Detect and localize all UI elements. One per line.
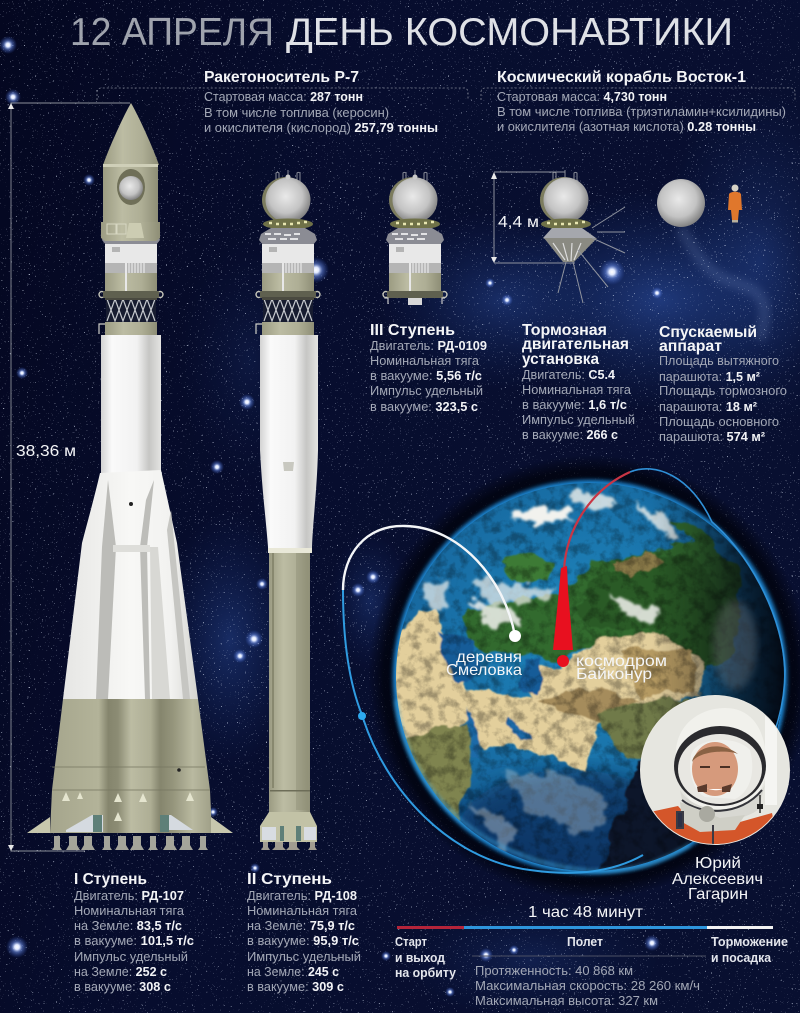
flight duration timeline: Максимальная высота: 327 км [475,993,658,1008]
launch marker and label [557,653,667,683]
text: stage II: Двигатель: РД-108 [247,888,357,903]
rocket: full R-7 with fairing [27,103,233,850]
orbit: white descent arc [343,526,515,636]
orbit: blue flight path upper right [630,469,785,730]
orbit: blue flight path left and bottom [343,590,643,873]
text: stage I: Двигатель: РД-107 [74,888,184,903]
name caption: Гагарин [688,886,748,903]
text: retro engine: в вакууме: 266 с [522,427,618,442]
landing marker and label: деревня [456,649,522,666]
text: stage III: в вакууме: 5,56 т/с [370,368,482,383]
text: stage I: в вакууме: 308 с [74,979,171,994]
text: retro engine: установка [522,351,599,368]
spacecraft Vostok with retro rocket [491,170,625,303]
text: descent module [659,324,787,444]
icon: red rocket silhouette [553,566,573,650]
text: stage I: в вакууме: 101,5 т/с [74,933,194,948]
text: stage I: I Ступень [74,871,147,888]
flight duration timeline: 1 час 48 минут [528,904,644,921]
rocket: second stage with spacecraft [256,170,320,850]
panel: R-7 launch vehicle stats: В том числе топлива (керосин) [204,105,389,120]
text: stage I: Импульс удельный [74,949,188,964]
spacecraft Vostok with retro rocket: 4,4 м [498,214,539,231]
boosters and core [27,335,233,850]
text: stage I: на Земле: 252 с [74,964,167,979]
panel: Vostok-1 spacecraft stats: и окислителя (азотная кислота) 0.28 тонны [497,119,756,134]
text: stage II: на Земле: 75,9 т/с [247,918,355,933]
flight duration timeline: Максимальная скорость: 28 260 км/ч [475,978,700,993]
text: stage III: в вакууме: 323,5 с [370,399,478,414]
flight duration timeline: Старт [395,934,427,949]
text: descent module: парашюта: 18 м² [659,399,758,414]
flight duration timeline: Полет [567,934,603,949]
rocket: third stage with spacecraft [383,170,447,305]
text: stage II: на Земле: 245 с [247,964,339,979]
descent capsule sphere [657,179,705,227]
panel: Vostok-1 spacecraft stats [481,69,795,134]
text: retro engine: Двигатель: С5.4 [522,367,616,382]
flight duration timeline: на орбиту [395,965,457,980]
panel: Vostok-1 spacecraft stats: В том числе топлива (триэтиламин+ксилидины) [497,104,786,119]
panel: Vostok-1 spacecraft stats: Космический корабль Восток-1 [497,69,746,86]
icon: cosmonaut figure [728,184,742,222]
text: retro engine: в вакууме: 1,6 т/с [522,397,627,412]
text: retro engine: Тормозная [522,322,607,339]
text: stage II: Номинальная тяга [247,903,358,918]
text: stage II [247,871,361,994]
panel: R-7 launch vehicle stats [97,69,468,135]
title [70,11,733,54]
title: ДЕНЬ КОСМОНАВТИКИ [286,11,733,54]
flight duration timeline: и посадка [711,950,772,965]
text: stage III: Импульс удельный [370,383,483,398]
text: stage I [74,871,194,994]
launch marker and label: космодром [576,653,667,670]
panel: R-7 launch vehicle stats: и окислителя (кислород) 257,79 тонны [204,120,438,135]
flight duration timeline: Протяженность: 40 868 км [475,963,633,978]
earth globe [368,455,800,899]
text: stage III: Номинальная тяга [370,353,480,368]
text: stage II: в вакууме: 309 с [247,979,344,994]
text: retro engine [522,322,635,442]
text: stage I: Номинальная тяга [74,903,185,918]
launch marker and label: Байконур [576,666,652,683]
panel: Vostok-1 spacecraft stats: Стартовая масса: 4,730 тонн [497,89,667,104]
text: descent module: парашюта: 1,5 м² [659,369,761,384]
text: retro engine: двигательная [522,336,629,353]
text: stage III [370,322,487,414]
text: stage II: в вакууме: 95,9 т/с [247,933,359,948]
landing marker and label: Смеловка [446,662,522,679]
panel: R-7 launch vehicle stats: Ракетоноситель Р-7 [204,69,359,86]
text: descent module: Площадь вытяжного [659,353,779,368]
text: descent module: Площадь тормозного [659,383,787,398]
flight duration timeline: Торможение [711,934,788,949]
text: retro engine: Номинальная тяга [522,382,632,397]
flight duration timeline: и выход [395,950,446,965]
flight duration timeline [395,904,788,1008]
text: stage II: II Ступень [247,871,332,888]
text: descent module: Площадь основного [659,414,779,429]
text: descent module: парашюта: 574 м² [659,429,766,444]
text: descent module: аппарат [659,338,722,355]
height bracket 38,36 m [8,103,130,851]
orbit: red ascent arc [564,472,630,570]
text: retro engine: Импульс удельный [522,412,635,427]
panel: R-7 launch vehicle stats: Стартовая масса: 287 тонн [204,89,363,104]
landing marker and label [446,630,522,679]
text: stage II: Импульс удельный [247,949,361,964]
icon: spacecraft marker [358,712,366,720]
portrait: Yuri Gagarin [640,695,790,850]
text: stage III: III Ступень [370,322,455,339]
name caption: Алексеевич [672,871,763,888]
name caption [672,855,763,903]
height bracket 38,36 m: 38,36 м [16,443,76,460]
name caption: Юрий [695,855,741,872]
text: stage I: на Земле: 83,5 т/с [74,918,182,933]
title: 12 АПРЕЛЯ [70,11,274,54]
text: descent module: Спускаемый [659,324,757,341]
text: stage III: Двигатель: РД-0109 [370,338,487,353]
